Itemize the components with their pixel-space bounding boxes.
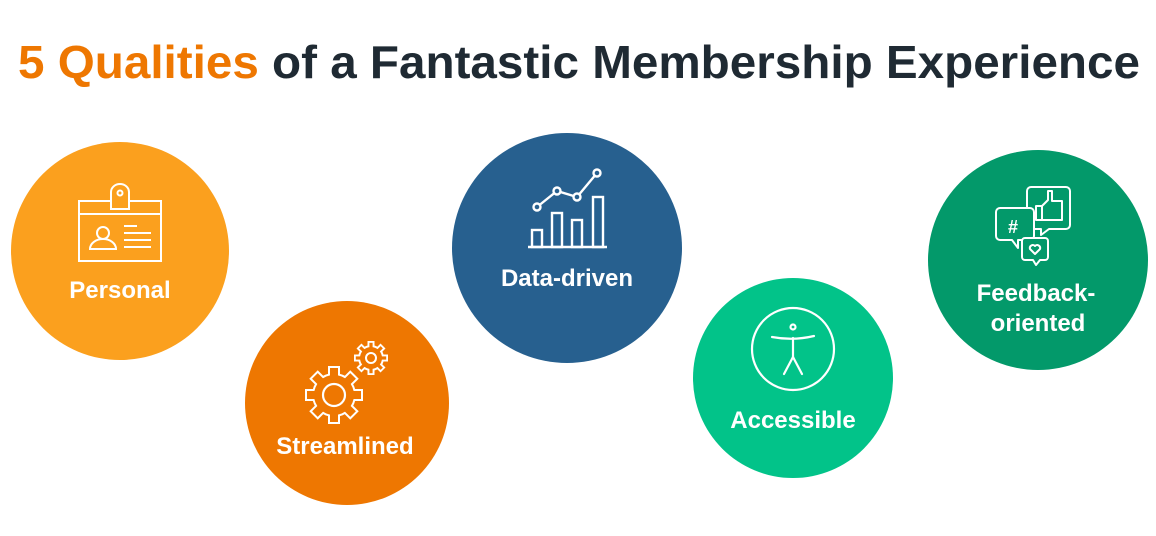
label: feedback-oriented: Feedback- bbox=[977, 280, 1095, 307]
panel: streamlined bbox=[245, 301, 449, 505]
icon: speech bubbles bbox=[996, 187, 1070, 265]
title: 5 Qualities of a Fantastic Membership Experience bbox=[18, 36, 1140, 88]
icon: gears bbox=[305, 341, 388, 424]
panel: data-driven bbox=[452, 133, 682, 363]
icon: chart bbox=[528, 170, 607, 247]
label: personal: Personal bbox=[69, 277, 171, 304]
panel: feedback-oriented: oriented bbox=[991, 310, 1085, 337]
label: accessible: Accessible bbox=[730, 407, 856, 434]
icon: speech bubbles: # bbox=[1008, 217, 1018, 237]
panel: feedback-oriented bbox=[928, 150, 1148, 370]
label: data-driven: Data-driven bbox=[501, 265, 633, 292]
icon: accessibility bbox=[752, 308, 834, 390]
panel: personal bbox=[11, 142, 229, 360]
icon: id badge bbox=[79, 184, 161, 261]
label: streamlined: Streamlined bbox=[276, 433, 414, 460]
panel: accessible bbox=[693, 278, 893, 478]
